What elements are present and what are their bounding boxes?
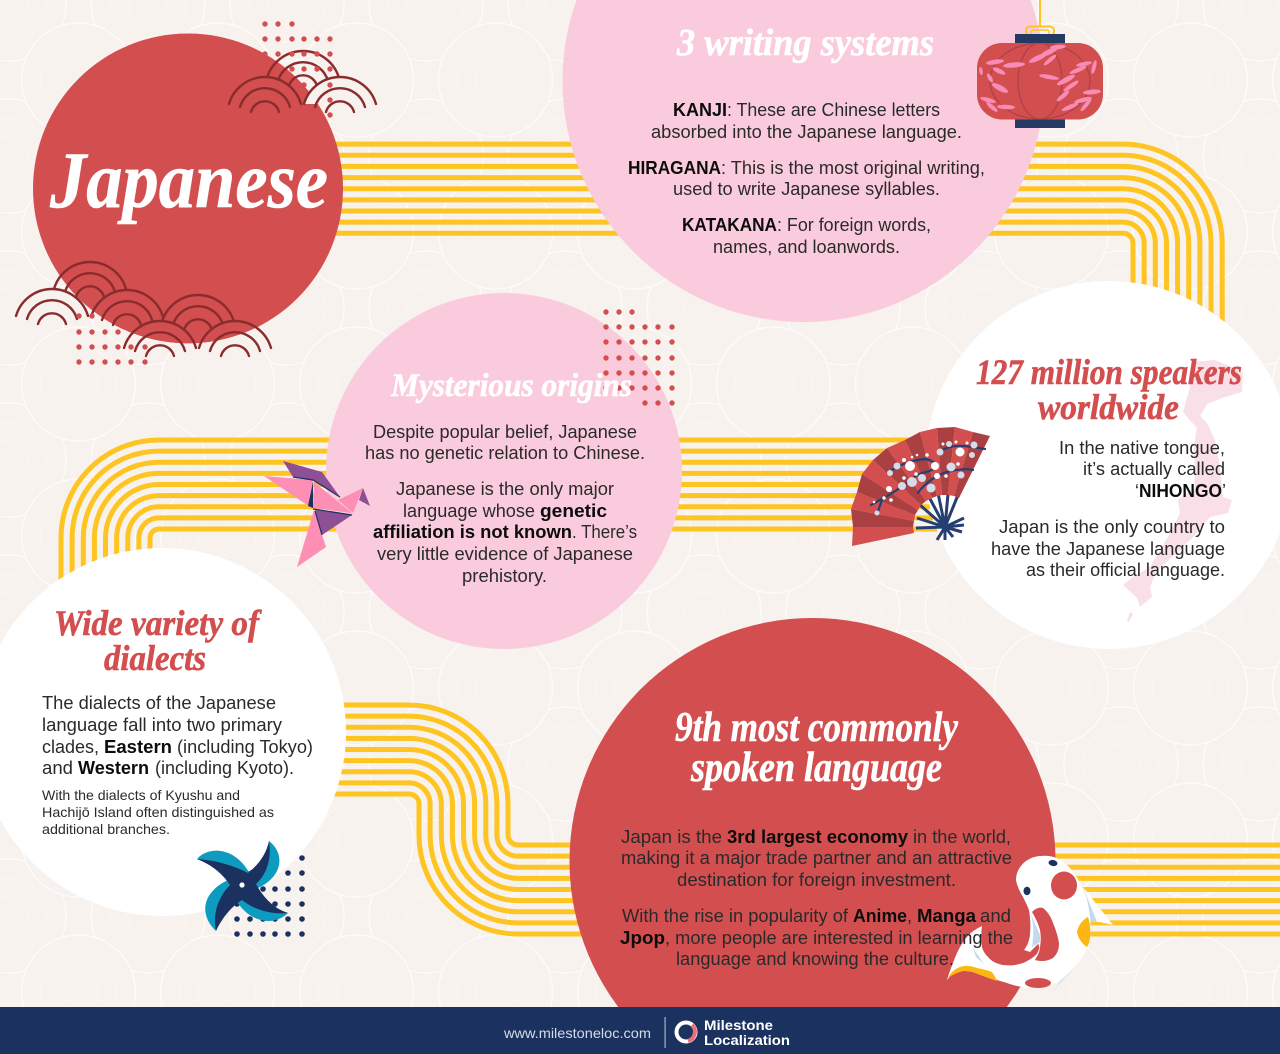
text block: main: Western: [78, 758, 149, 778]
logo ring: [676, 1022, 696, 1042]
text block: economy: in the world,: [913, 827, 1011, 847]
heading: [54, 603, 262, 678]
text block: main: (including Kyoto).: [155, 758, 294, 778]
heading: [976, 352, 1242, 427]
dots: [603, 309, 675, 406]
text block: hiragana: [628, 158, 985, 199]
heading: Mysterious origins: [390, 368, 632, 404]
text block: In the native tongue,: [1059, 438, 1225, 458]
panel: mysterious origins: [326, 293, 682, 649]
text block: katakana: : For foreign words,: [777, 215, 931, 235]
text block: main: language fall into two primary: [42, 715, 282, 735]
heading: Wide variety of: [54, 603, 262, 643]
yellow stripe band: lower S-curve: [300, 705, 1280, 934]
text block: culture: language and knowing the culture.: [676, 949, 954, 969]
text block: kanji: [651, 100, 962, 142]
title: Japanese: [49, 137, 328, 225]
map of Japan: [1123, 360, 1243, 622]
text block: NIHONGO: [1139, 481, 1222, 501]
icon: koi fish: [947, 856, 1113, 992]
text block: kanji: absorbed into the Japanese language.: [651, 122, 962, 142]
text block: culture: [620, 906, 1013, 969]
text block: note: [42, 787, 274, 837]
text block: Japanese is the only major: [396, 479, 614, 499]
text block: as their official language.: [1026, 560, 1225, 580]
panel: 127 million speakers: [925, 281, 1280, 649]
heading: [675, 705, 958, 791]
text block: very little evidence of Japanese: [377, 544, 633, 564]
yellow stripe band: middle: [61, 440, 940, 600]
text block: economy: making it a major trade partner and an attractive: [621, 848, 1012, 868]
text block: language whose: [403, 501, 535, 521]
logo text: [704, 1017, 790, 1048]
text block: Despite popular belief, Japanese: [373, 422, 637, 442]
text block: culture: Jpop: [620, 928, 665, 948]
text block: economy: 3rd largest economy: [727, 827, 908, 847]
icon: origami crane: [264, 461, 370, 567]
text block: . There’s: [572, 522, 637, 542]
heading: 3 writing systems: [676, 22, 934, 64]
text block: culture: With the rise in popularity of: [622, 906, 849, 926]
heading: worldwide: [1038, 387, 1179, 427]
panel: 3 writing systems: [562, 0, 1044, 322]
text block: prehistory.: [462, 566, 547, 586]
text block: Japan is the only country to: [999, 517, 1225, 537]
logo text: Milestone: [704, 1017, 773, 1033]
text block: economy: destination for foreign investment.: [677, 870, 956, 890]
text block: affiliation is not known: [373, 522, 572, 542]
text block: main: and: [42, 758, 73, 778]
text block: has no genetic relation to Chinese.: [365, 443, 645, 463]
text block: culture: ,: [907, 906, 912, 926]
text block: katakana: names, and loanwords.: [713, 237, 900, 257]
wave cluster: top right: [229, 51, 376, 112]
heading: 127 million speakers: [976, 352, 1242, 392]
text block: katakana: KATAKANA: [682, 215, 777, 235]
text block: have the Japanese language: [991, 539, 1225, 559]
yellow stripe band: top: [300, 144, 1222, 325]
text block: genetic: [540, 501, 607, 521]
text block: hiragana: : This is the most original writing,: [721, 158, 985, 178]
text block: note: With the dialects of Kyushu and: [42, 787, 240, 803]
panel: 9th most commonly spoken language: [570, 618, 1056, 1054]
panel: wide variety of dialects: [0, 548, 346, 916]
text block: note: Hachijō Island often distinguished as: [42, 804, 274, 820]
text block: main: [42, 693, 313, 778]
text block: main: clades,: [42, 737, 99, 757]
text block: note: additional branches.: [42, 821, 170, 837]
icon: shuriken: [197, 841, 288, 931]
text block: economy: Japan is the: [621, 827, 722, 847]
heading: 9th most commonly: [675, 705, 958, 751]
text block: [991, 438, 1226, 580]
text block: culture: Manga: [917, 906, 977, 926]
icon: folding fan: [851, 427, 990, 546]
footer: [0, 1007, 1280, 1054]
wave cluster: bottom left: [16, 262, 271, 356]
text block: ’: [1222, 481, 1226, 501]
website: www.milestoneloc.com: [503, 1025, 651, 1041]
text block: ‘: [1135, 481, 1139, 501]
text block: main: The dialects of the Japanese: [42, 693, 276, 713]
logo text: Localization: [704, 1032, 790, 1048]
text block: kanji: : These are Chinese letters: [727, 100, 940, 120]
heading: dialects: [104, 638, 206, 678]
text block: hiragana: HIRAGANA: [628, 158, 721, 178]
heading: spoken language: [690, 745, 942, 791]
dots: navy: [234, 855, 305, 937]
panel: title circle: [16, 21, 376, 365]
text block: it’s actually called: [1083, 459, 1225, 479]
text block: katakana: [682, 215, 931, 257]
text block: culture: Anime: [853, 906, 907, 926]
text block: [365, 422, 645, 586]
text block: hiragana: used to write Japanese syllables.: [673, 179, 940, 199]
text block: kanji: KANJI: [673, 100, 727, 120]
text block: main: Eastern: [104, 737, 172, 757]
text block: culture: , more people are interested in learning the: [665, 928, 1013, 948]
dots: top right: [262, 21, 333, 118]
text block: main: (including Tokyo): [177, 737, 313, 757]
text block: economy: [621, 827, 1012, 890]
text block: culture: and: [980, 906, 1011, 926]
icon: paper lantern: [977, 0, 1103, 128]
dots: bottom left: [76, 313, 148, 365]
